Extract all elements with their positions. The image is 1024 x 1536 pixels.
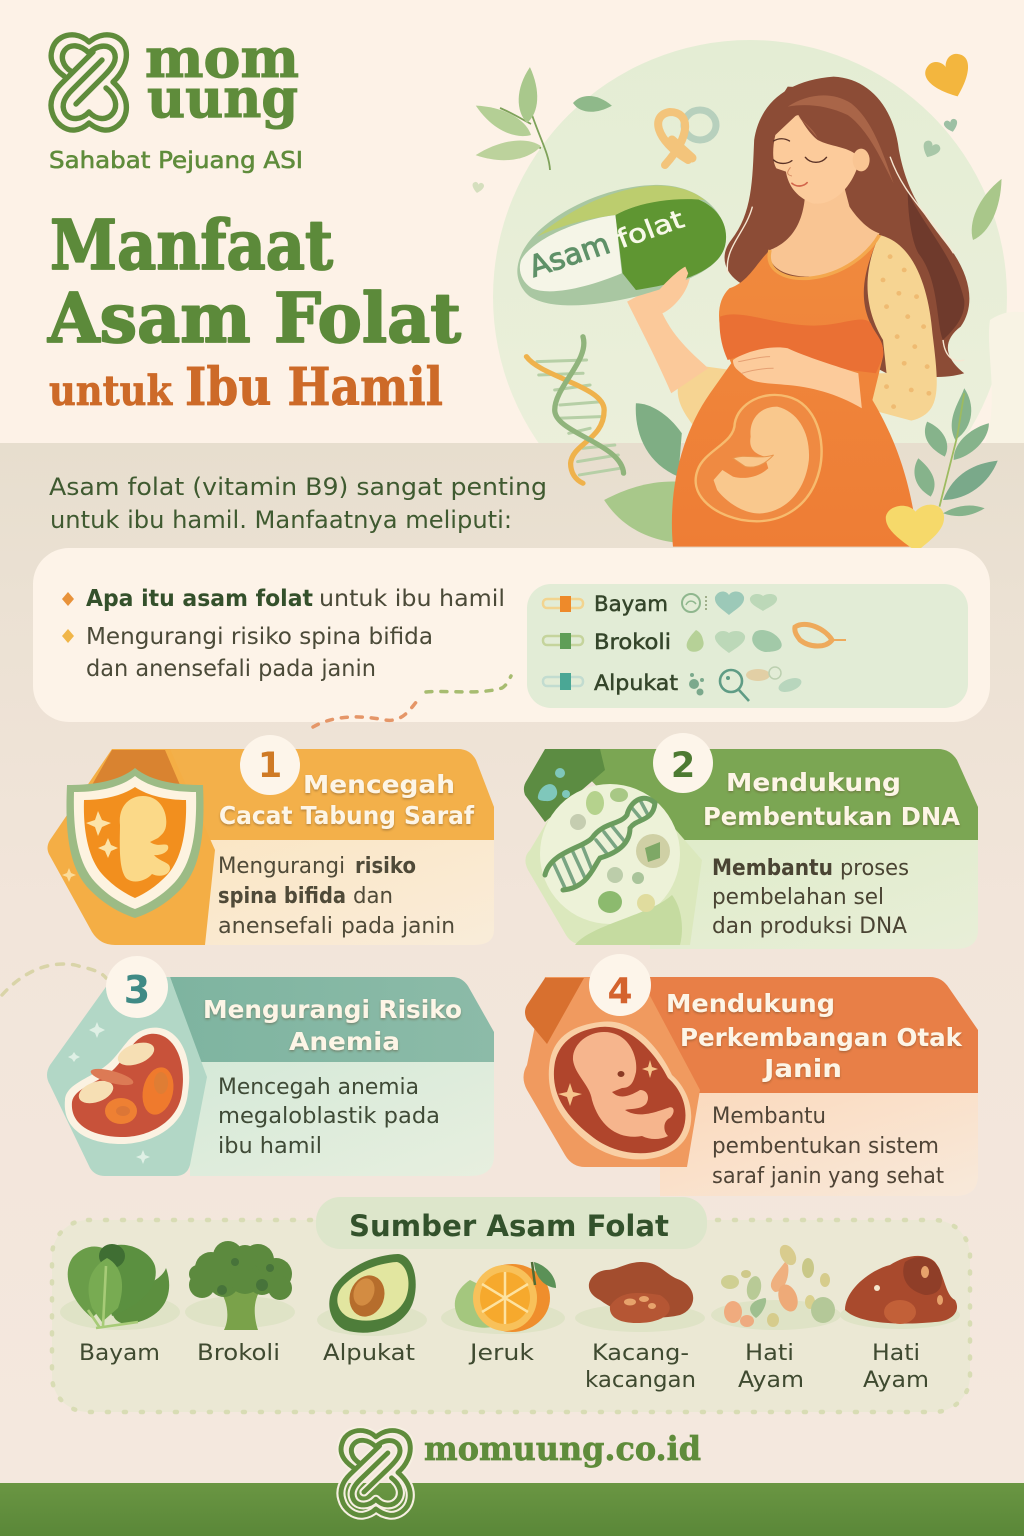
card 1 description: risiko xyxy=(355,854,416,879)
icon: broccoli xyxy=(189,1241,292,1330)
capsule icons xyxy=(543,596,583,690)
hand on belly xyxy=(733,347,862,408)
dress shading band xyxy=(720,314,883,373)
card 2 dark corner xyxy=(524,749,605,822)
icon: orange xyxy=(455,1262,556,1332)
card 1 description: dan xyxy=(353,884,393,909)
food labels: Kacang- xyxy=(592,1341,689,1366)
right sleeve xyxy=(857,235,937,421)
brand wordmark: uung xyxy=(147,66,298,130)
card 2 header xyxy=(560,749,978,840)
lower beige band xyxy=(0,443,1024,1483)
intro panel xyxy=(33,548,990,722)
bullet list: Apa itu asam folat xyxy=(86,586,313,612)
card 2: DNA formation xyxy=(524,733,978,949)
pill capsule xyxy=(517,185,726,305)
fetus arm xyxy=(733,455,774,467)
card 2 hexagon xyxy=(525,800,702,945)
food sources panel xyxy=(52,1197,970,1412)
forearm holding pill xyxy=(627,267,708,393)
card 3 body xyxy=(190,1060,494,1176)
floating hearts xyxy=(471,50,978,194)
brand wordmark: mom xyxy=(145,26,299,90)
cell with DNA illustration xyxy=(540,784,682,945)
food names: Bayam xyxy=(594,592,668,616)
title: Manfaat xyxy=(50,206,334,286)
card 4 body xyxy=(660,1090,978,1196)
card 1 title: Mencegah xyxy=(303,770,455,799)
hair highlights xyxy=(788,95,894,183)
icon: mixed legumes xyxy=(721,1242,835,1327)
dotted connector left xyxy=(2,964,106,995)
number badge 3 xyxy=(106,956,168,1018)
card 3: anemia xyxy=(47,956,494,1176)
card 2 title: Pembentukan DNA xyxy=(703,802,961,831)
hair back xyxy=(725,77,969,377)
number badge 2 xyxy=(653,733,713,793)
food labels: Hati xyxy=(872,1341,920,1366)
card 2 description: Membantu xyxy=(712,856,833,881)
pill green half xyxy=(615,197,726,290)
pill label: Asam xyxy=(525,227,615,285)
card 1 description: spina bifida xyxy=(218,884,346,909)
food labels xyxy=(79,1341,929,1393)
food labels: Alpukat xyxy=(323,1341,415,1366)
face xyxy=(773,113,858,204)
card 2 body xyxy=(650,838,978,949)
right plant xyxy=(914,388,998,516)
DNA double helix xyxy=(545,798,655,890)
food sources heading: Sumber Asam Folat xyxy=(349,1209,669,1243)
number badge 1: 1 xyxy=(258,746,282,786)
footer logo xyxy=(341,1431,410,1515)
number badge 3: 3 xyxy=(124,968,150,1012)
food shadows xyxy=(60,1294,960,1336)
pregnant woman illustration xyxy=(517,77,998,552)
card 3 hexagon xyxy=(47,977,207,1176)
card 3 title: Mengurangi Risiko xyxy=(203,995,462,1024)
food labels: Ayam xyxy=(738,1368,804,1393)
card 1 description: anensefali xyxy=(218,914,333,939)
food names xyxy=(594,592,678,695)
card 4 title: Perkembangan Otak xyxy=(680,1023,963,1052)
number badge 4: 4 xyxy=(607,971,633,1012)
card 2 description: pembelahan sel xyxy=(712,885,884,910)
card 4 header xyxy=(590,977,978,1093)
dotted connector xyxy=(313,676,511,727)
icon: spinach xyxy=(68,1244,169,1328)
card 4: fetal brain xyxy=(524,954,978,1196)
thumb xyxy=(654,267,688,307)
footer green band xyxy=(0,1483,1024,1536)
number badge 4 xyxy=(589,954,651,1016)
dress xyxy=(672,235,918,547)
pill label: folat xyxy=(613,205,688,255)
pill white half xyxy=(520,215,622,291)
card 1: neural tube xyxy=(48,735,494,945)
closed eyes and brow xyxy=(774,139,827,163)
brand logo xyxy=(51,35,126,130)
bullet list: untuk ibu hamil xyxy=(319,586,505,612)
title: untuk xyxy=(49,367,173,415)
card 3 description: megaloblastik pada xyxy=(218,1104,440,1129)
card 1 title: Cacat Tabung Saraf xyxy=(219,801,475,830)
intro text: untuk ibu hamil. Manfaatnya meliputi: xyxy=(50,506,512,534)
small food icons xyxy=(682,591,846,701)
food names: Alpukat xyxy=(594,671,678,695)
fingers xyxy=(738,357,774,373)
plant behind xyxy=(604,403,696,543)
bullet list: Mengurangi risiko spina bifida xyxy=(86,624,433,650)
card 3 header xyxy=(170,977,494,1062)
leaf right of illustration xyxy=(964,175,1010,244)
card 1 dark corner xyxy=(92,750,180,785)
title: Ibu Hamil xyxy=(185,357,443,418)
number badge 1 xyxy=(240,735,300,795)
embryo illustration xyxy=(549,1021,691,1159)
food labels: Bayam xyxy=(79,1341,160,1366)
blood cell illustration xyxy=(65,1028,189,1144)
icon: avocado xyxy=(329,1254,416,1333)
footer website: momuung.co.id xyxy=(424,1429,701,1468)
card 4 description xyxy=(712,1104,944,1189)
card 1 hexagon xyxy=(48,749,215,945)
tagline: Sahabat Pejuang ASI xyxy=(49,148,303,174)
left sleeve xyxy=(678,367,731,433)
shield icon xyxy=(62,768,204,918)
card 4 description: saraf janin yang sehat xyxy=(712,1164,944,1189)
hair shadow xyxy=(908,190,964,340)
fetus in shield xyxy=(120,796,170,881)
card 3 description xyxy=(218,1075,440,1159)
card 2 title xyxy=(703,768,961,831)
icon: beans mound xyxy=(589,1262,693,1323)
pill label xyxy=(525,205,688,285)
neck and chest xyxy=(770,187,879,277)
hair front xyxy=(765,87,869,155)
card 3 description: ibu hamil xyxy=(218,1134,322,1159)
card 4 description: pembentukan sistem xyxy=(712,1134,939,1159)
intro text: Asam folat (vitamin B9) sangat penting xyxy=(49,473,547,501)
number badge 2: 2 xyxy=(671,746,695,786)
card 1 body xyxy=(180,838,494,945)
food labels: kacangan xyxy=(585,1368,696,1393)
card 4 title: Janin xyxy=(762,1054,842,1083)
womb outline xyxy=(696,395,822,521)
food names: Brokoli xyxy=(594,630,671,654)
yellow heart xyxy=(886,505,944,552)
food list box xyxy=(527,584,968,708)
sparkles xyxy=(68,1022,150,1164)
food labels: Hati xyxy=(745,1341,794,1366)
icon: chicken liver A xyxy=(845,1256,957,1324)
DNA helix illustration xyxy=(526,337,624,483)
card 3 title: Anemia xyxy=(289,1027,400,1056)
card 1 header xyxy=(120,749,494,840)
food labels: Ayam xyxy=(863,1368,929,1393)
card 3 title xyxy=(203,995,462,1056)
bullet list: dan anensefali pada janin xyxy=(86,656,376,682)
illustration backdrop circle xyxy=(493,40,1007,554)
sleeve dots xyxy=(881,254,931,409)
title: Asam Folat xyxy=(47,279,462,359)
bullet list xyxy=(62,586,505,682)
pill highlight xyxy=(537,186,705,237)
card 4 hexagon xyxy=(524,977,700,1167)
food sources heading xyxy=(316,1197,707,1249)
nose and mouth xyxy=(788,167,792,176)
title xyxy=(47,206,462,418)
droplets in corner xyxy=(538,768,570,801)
soft cloud at right edge xyxy=(985,312,1024,445)
food labels: Jeruk xyxy=(468,1341,534,1366)
decorative leaves top left of illustration xyxy=(471,67,612,170)
card 2 description: dan produksi DNA xyxy=(712,914,907,939)
hair light strands xyxy=(727,157,964,361)
card 2 description: proses xyxy=(840,856,909,881)
brand wordmark xyxy=(145,26,299,130)
card 1 description: Mengurangi xyxy=(218,854,345,879)
card 4 title: Mendukung xyxy=(666,989,835,1018)
card 1 title xyxy=(219,770,475,830)
card 2 title: Mendukung xyxy=(726,768,901,797)
awareness ribbon xyxy=(658,110,716,165)
food labels: Brokoli xyxy=(197,1341,280,1366)
card 1 description xyxy=(218,854,455,939)
dress neckline trim xyxy=(769,235,879,278)
card 4 dark corner xyxy=(525,978,584,1044)
fetus xyxy=(714,407,809,513)
card 3 description: Mencegah anemia xyxy=(218,1075,419,1100)
card 4 title xyxy=(666,989,963,1083)
card 2 description xyxy=(712,856,909,939)
intro text xyxy=(49,473,547,534)
card 4 description: Membantu xyxy=(712,1104,826,1129)
card 1 description: pada janin xyxy=(341,914,455,939)
ear xyxy=(853,149,870,171)
